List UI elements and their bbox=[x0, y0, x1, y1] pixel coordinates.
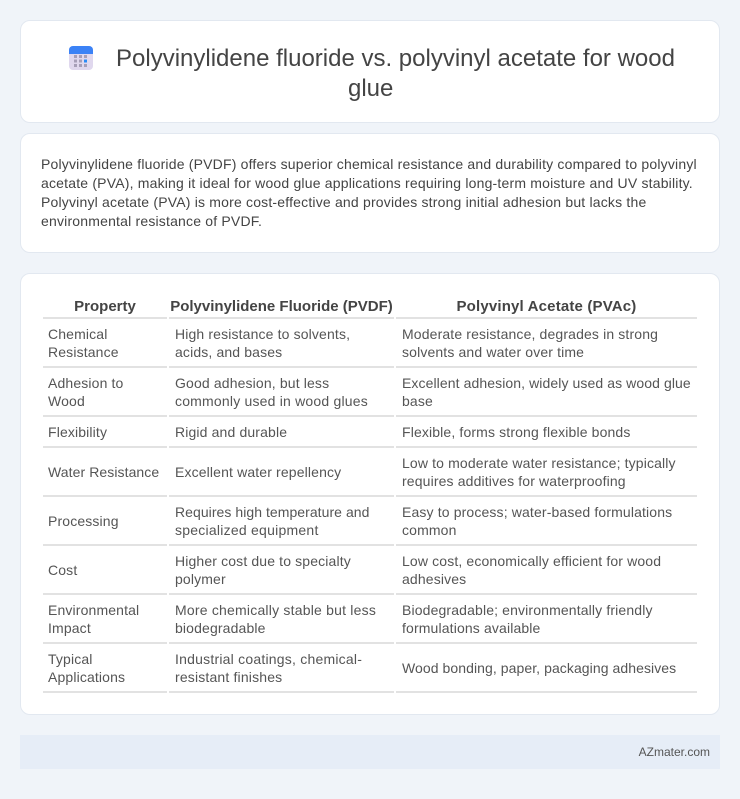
title card bbox=[20, 20, 720, 123]
row: processing: Requires high temperature and bbox=[175, 504, 369, 520]
row: chemical resistance: Resistance bbox=[48, 344, 119, 360]
row: environmental impact: More chemically stable but less bbox=[175, 602, 376, 618]
row: water resistance: Excellent water repellency bbox=[175, 464, 341, 480]
header: PVDF: Polyvinylidene Fluoride (PVDF) bbox=[170, 298, 393, 315]
row: water resistance: Water Resistance bbox=[48, 464, 159, 480]
row: cost: Cost bbox=[48, 562, 77, 578]
row: flexibility: Flexible, forms strong flexible bonds bbox=[402, 424, 631, 440]
row: chemical resistance: Moderate resistance, degrades in strong bbox=[402, 326, 658, 342]
row: environmental impact: Environmental bbox=[48, 602, 139, 618]
row: water resistance: Low to moderate water resistance; typically bbox=[402, 455, 676, 471]
row: processing: Processing bbox=[48, 513, 119, 529]
row: adhesion to wood: Excellent adhesion, widely used as wood glue bbox=[402, 375, 691, 391]
row: chemical resistance: solvents and water over time bbox=[402, 344, 584, 360]
row: typical applications: Industrial coatings, chemical- bbox=[175, 651, 362, 667]
summary text: Polyvinylidene fluoride (PVDF) offers superior chemical resistance and durability compared to polyvinyl bbox=[41, 156, 697, 172]
title bbox=[116, 45, 675, 102]
row: typical applications: Wood bonding, paper, packaging adhesives bbox=[402, 660, 676, 676]
row: flexibility: Rigid and durable bbox=[175, 424, 287, 440]
footer bar bbox=[20, 735, 720, 769]
row: typical applications: resistant finishes bbox=[175, 669, 282, 685]
row: environmental impact: Impact bbox=[48, 620, 91, 636]
row: environmental impact: formulations available bbox=[402, 620, 540, 636]
row: adhesion to wood: commonly used in wood glues bbox=[175, 393, 368, 409]
row: cost: adhesives bbox=[402, 571, 466, 587]
row: adhesion to wood: Adhesion to bbox=[48, 375, 123, 391]
row: processing: common bbox=[402, 522, 457, 538]
row: environmental impact: biodegradable bbox=[175, 620, 266, 636]
row: adhesion to wood: base bbox=[402, 393, 433, 409]
summary text: environmental resistance of PVDF. bbox=[41, 213, 262, 229]
summary text: Polyvinyl acetate (PVA) is more cost-effective and provides strong initial adhesion but lacks the bbox=[41, 194, 646, 210]
summary card bbox=[20, 133, 720, 253]
row: cost: Higher cost due to specialty bbox=[175, 553, 351, 569]
row: chemical resistance: acids, and bases bbox=[175, 344, 282, 360]
row: cost: Low cost, economically efficient for wood bbox=[402, 553, 661, 569]
header: PVAc: Polyvinyl Acetate (PVAc) bbox=[456, 298, 636, 315]
row: water resistance: requires additives for waterproofing bbox=[402, 473, 626, 489]
summary text bbox=[41, 156, 697, 229]
row: adhesion to wood: Wood bbox=[48, 393, 85, 409]
title: Polyvinylidene fluoride vs. polyvinyl acetate for wood bbox=[116, 45, 675, 72]
row: environmental impact: Biodegradable; environmentally friendly bbox=[402, 602, 653, 618]
row: chemical resistance: Chemical bbox=[48, 326, 107, 342]
row: chemical resistance: High resistance to solvents, bbox=[175, 326, 350, 342]
header: property: Property bbox=[74, 298, 136, 315]
table card bbox=[20, 273, 720, 715]
summary text: acetate (PVA), making it ideal for wood glue applications requiring long-term moisture and UV stability. bbox=[41, 175, 693, 191]
row: typical applications: Typical bbox=[48, 651, 93, 667]
row: processing: specialized equipment bbox=[175, 522, 319, 538]
icon: calendar bbox=[69, 46, 93, 70]
row: cost: polymer bbox=[175, 571, 226, 587]
title: glue bbox=[348, 75, 393, 102]
footer brand: AZmater.com bbox=[639, 745, 710, 759]
row: flexibility: Flexibility bbox=[48, 424, 107, 440]
row: processing: Easy to process; water-based formulations bbox=[402, 504, 672, 520]
row: adhesion to wood: Good adhesion, but less bbox=[175, 375, 329, 391]
row: typical applications: Applications bbox=[48, 669, 125, 685]
